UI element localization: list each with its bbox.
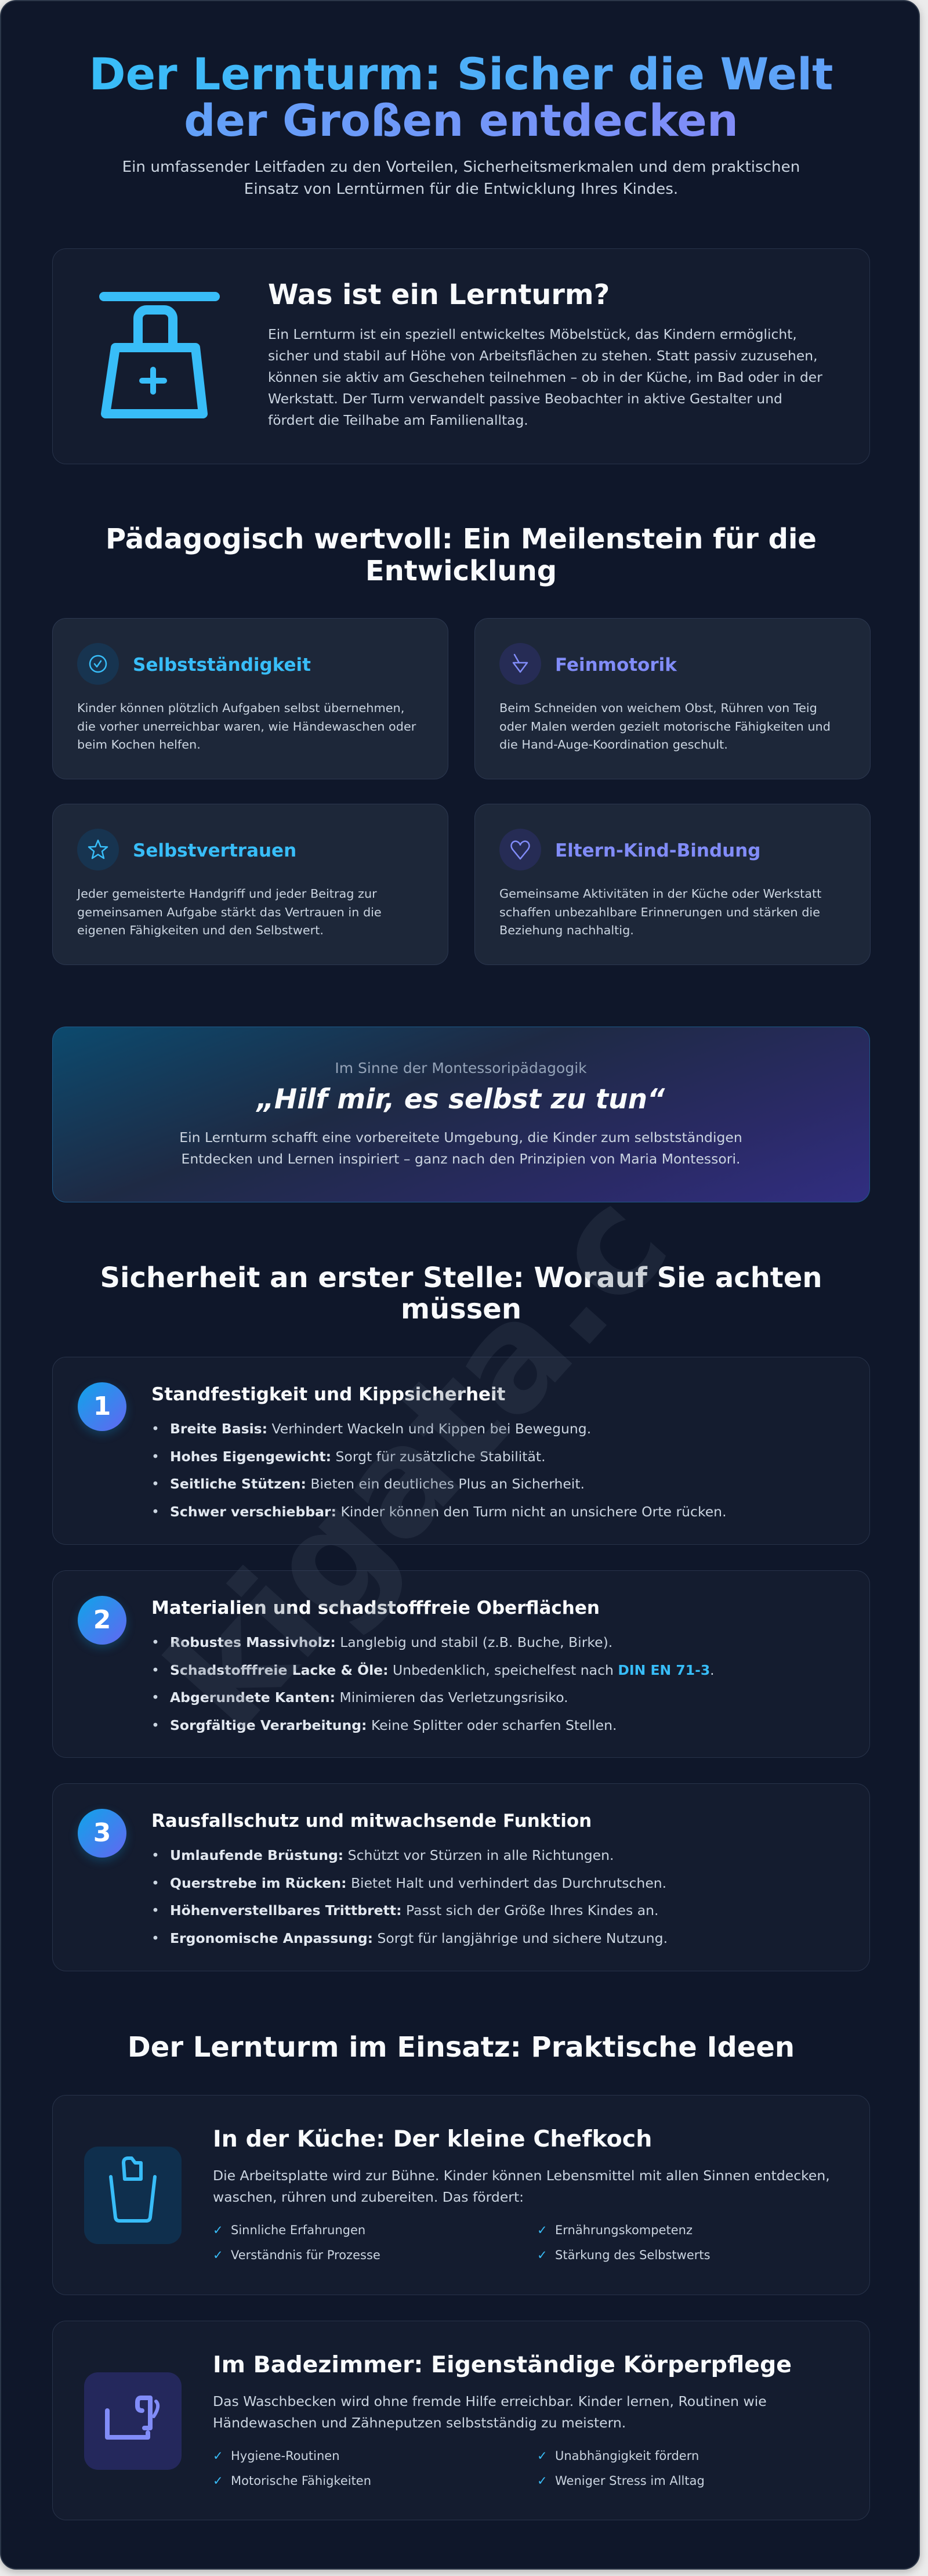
panel: Küche: Die Arbeitsplatte wird zur Bühne. Kinder können Lebensmittel mit allen Sinnen entdecken,: [213, 2167, 830, 2184]
panel: Selbstständigkeit: Selbstständigkeit: [133, 655, 311, 675]
panel: Eltern-Kind-Bindung: Beziehung nachhaltig.: [499, 923, 634, 937]
bullet list: Umlaufende Brüstung: Schützt vor Stürzen in alle Richtungen.: [170, 1847, 614, 1863]
checklist: Stärkung des Selbstwerts: [555, 2248, 710, 2262]
panel: Selbstvertrauen: gemeinsamen Aufgabe stärkt das Vertrauen in die: [77, 905, 382, 919]
panel: Feinmotorik: Feinmotorik: [555, 655, 677, 675]
heading: Was ist ein Lernturm?: [268, 279, 610, 311]
checklist: ✓: [213, 2223, 223, 2237]
heading: Pädagogisch wertvoll: Entwicklung: [365, 555, 557, 587]
panel: safety 3: [52, 1783, 870, 1971]
panel: Selbstvertrauen: eigenen Fähigkeiten und den Selbstwert.: [77, 923, 324, 937]
panel: safety 2: Materialien und schadstofffreie Oberflächen: [151, 1598, 600, 1618]
checklist: Sinnliche Erfahrungen: [231, 2223, 365, 2237]
number badge 3: [78, 1809, 126, 1858]
panel: Was ist ein Lernturm: [52, 248, 870, 464]
subheading: Im Sinne der Montessoripädagogik: [335, 1060, 587, 1076]
title: [89, 48, 833, 146]
panel: safety 1: [52, 1357, 870, 1545]
panel: Selbstvertrauen: Jeder gemeisterte Handgriff und jeder Beitrag zur: [77, 887, 377, 901]
bullet list: [153, 1421, 727, 1519]
panel: Eltern-Kind-Bindung: schaffen unbezahlbare Erinnerungen und stärken die: [499, 905, 820, 919]
panel: Selbstvertrauen: Selbstvertrauen: [133, 840, 296, 861]
panel: Selbstständigkeit: [52, 618, 448, 779]
icon: bathroom sink: [84, 2372, 182, 2470]
checklist: Ernährungskompetenz: [555, 2223, 693, 2237]
icon: heart: [499, 829, 541, 870]
checklist: ✓: [537, 2474, 548, 2488]
panel: safety 2: [52, 1570, 870, 1758]
panel: Badezimmer: [52, 2321, 870, 2520]
bullet list: Ergonomische Anpassung: Sorgt für langjährige und sichere Nutzung.: [170, 1930, 668, 1946]
heading: Sicherheit: [100, 1262, 822, 1325]
checklist: Motorische Fähigkeiten: [231, 2474, 371, 2488]
panel: safety 3: Rausfallschutz und mitwachsende Funktion: [151, 1811, 592, 1831]
panel: Eltern-Kind-Bindung: Gemeinsame Aktivitäten in der Küche oder Werkstatt: [499, 887, 821, 901]
checklist: ✓: [537, 2248, 548, 2262]
icon: bowl whisk: [499, 643, 541, 685]
panel: Selbstvertrauen: [52, 804, 448, 965]
icon: check circle: [77, 643, 119, 685]
icon: star: [77, 829, 119, 870]
quote: „Hilf mir, es selbst zu tun“: [257, 1083, 665, 1115]
text: Entdecken und Lernen inspiriert – ganz nach den Prinzipien von Maria Montessori.: [182, 1151, 740, 1167]
text block: [268, 326, 822, 428]
panel: Feinmotorik: Beim Schneiden von weichem Obst, Rühren von Teig: [499, 701, 817, 715]
text block: sicher und stabil auf Höhe von Arbeitsflächen zu stehen. Statt passiv zuzusehen,: [268, 348, 818, 364]
checklist: Weniger Stress im Alltag: [555, 2474, 705, 2488]
checklist: ✓: [213, 2449, 223, 2463]
number badge 1: 1: [93, 1392, 111, 1421]
number badge 1: [78, 1382, 126, 1431]
text: Ein Lernturm schafft eine vorbereitete Umgebung, die Kinder zum selbstständigen: [179, 1129, 742, 1146]
bullet list: Schwer verschiebbar: Kinder können den Turm nicht an unsichere Orte rücken.: [170, 1503, 727, 1519]
bullet list: Seitliche Stützen: Bieten ein deutliches Plus an Sicherheit.: [170, 1476, 585, 1492]
panel: Badezimmer: Im Badezimmer: Eigenständige Körperpflege: [213, 2351, 792, 2378]
heading: Sicherheit: Sicherheit an erster Stelle: Worauf Sie achten: [100, 1262, 822, 1294]
subtitle: Einsatz von Lerntürmen für die Entwicklung Ihres Kindes.: [244, 180, 678, 198]
panel: Badezimmer: Händewaschen und Zähneputzen selbstständig zu meistern.: [213, 2415, 626, 2431]
heading: Pädagogisch wertvoll: [106, 523, 817, 587]
title: Der Lernturm: Sicher die Welt: [89, 48, 833, 100]
bullet list: Sorgfältige Verarbeitung: Keine Splitter oder scharfen Stellen.: [170, 1717, 617, 1733]
text block: können sie aktiv am Geschehen teilnehmen – ob in der Küche, im Bad oder in der: [268, 369, 822, 385]
panel: Küche: waschen, rühren und zubereiten. Das fördert:: [213, 2189, 524, 2205]
checklist: ✓: [537, 2449, 548, 2463]
watermark: kigata.c: [135, 1160, 699, 1761]
checklist: Hygiene-Routinen: [231, 2449, 340, 2463]
panel: Selbstständigkeit: die vorher unerreichbar waren, wie Händewaschen oder: [77, 720, 416, 734]
panel: Badezimmer: Das Waschbecken wird ohne fremde Hilfe erreichbar. Kinder lernen, Routinen wie: [213, 2393, 767, 2409]
panel: Küche: In der Küche: Der kleine Chefkoch: [213, 2126, 652, 2152]
title: der Großen entdecken: [184, 95, 738, 146]
checklist: [213, 2449, 705, 2488]
panel: Selbstständigkeit: Kinder können plötzlich Aufgaben selbst übernehmen,: [77, 701, 404, 715]
icon: kitchen cup: [84, 2147, 182, 2244]
text block: Werkstatt. Der Turm verwandelt passive Beobachter in aktive Gestalter und: [268, 391, 782, 407]
bullet list: Hohes Eigengewicht: Sorgt für zusätzliche Stabilität.: [170, 1448, 546, 1465]
heading: Pädagogisch wertvoll: Pädagogisch wertvoll: Ein Meilenstein für die: [106, 523, 817, 555]
panel: Feinmotorik: die Hand-Auge-Koordination geschult.: [499, 738, 728, 752]
bullet list: Abgerundete Kanten: Minimieren das Verletzungsrisiko.: [170, 1689, 568, 1706]
text block: fördert die Teilhabe am Familienalltag.: [268, 412, 528, 428]
number badge 2: 2: [93, 1605, 111, 1635]
panel: safety 1: Standfestigkeit und Kippsicherheit: [151, 1384, 506, 1405]
callout: Montessori quote: [52, 1027, 870, 1202]
subtitle: Ein umfassender Leitfaden zu den Vorteilen, Sicherheitsmerkmalen und dem praktischen: [122, 158, 800, 176]
bullet list: [153, 1847, 668, 1946]
panel: Selbstständigkeit: beim Kochen helfen.: [77, 738, 201, 752]
bullet list: Schadstofffreie Lacke & Öle: Unbedenklich, speichelfest nach DIN EN 71-3.: [170, 1662, 715, 1678]
bullet list: Querstrebe im Rücken: Bietet Halt und verhindert das Durchrutschen.: [170, 1874, 666, 1891]
bullet list: Breite Basis: Verhindert Wackeln und Kippen bei Bewegung.: [170, 1421, 591, 1437]
bullet list: [153, 1634, 715, 1733]
number badge 3: 3: [93, 1818, 111, 1848]
checklist: [213, 2223, 710, 2262]
subtitle: [122, 158, 800, 198]
panel: Küche: [52, 2095, 870, 2295]
icon: learning tower: [99, 292, 220, 418]
checklist: ✓: [213, 2248, 223, 2262]
number badge 2: [78, 1596, 126, 1645]
checklist: ✓: [213, 2474, 223, 2488]
checklist: Verständnis für Prozesse: [231, 2248, 380, 2262]
bullet list: Robustes Massivholz: Langlebig und stabil (z.B. Buche, Birke).: [170, 1634, 612, 1650]
panel: Eltern-Kind-Bindung: [474, 804, 871, 965]
heading: Praktische Ideen: Der Lernturm im Einsatz: Praktische Ideen: [128, 2031, 795, 2064]
panel: Feinmotorik: [474, 618, 871, 779]
panel: Eltern-Kind-Bindung: Eltern-Kind-Bindung: [555, 840, 761, 861]
heading: Sicherheit: müssen: [401, 1293, 521, 1325]
panel: Feinmotorik: oder Malen werden gezielt motorische Fähigkeiten und: [499, 720, 831, 734]
checklist: ✓: [537, 2223, 548, 2237]
text: [179, 1129, 742, 1167]
bullet list: Höhenverstellbares Trittbrett: Passt sich der Größe Ihres Kindes an.: [170, 1902, 659, 1919]
checklist: Unabhängigkeit fördern: [555, 2449, 699, 2463]
text block: Ein Lernturm ist ein speziell entwickeltes Möbelstück, das Kindern ermöglicht,: [268, 326, 797, 342]
